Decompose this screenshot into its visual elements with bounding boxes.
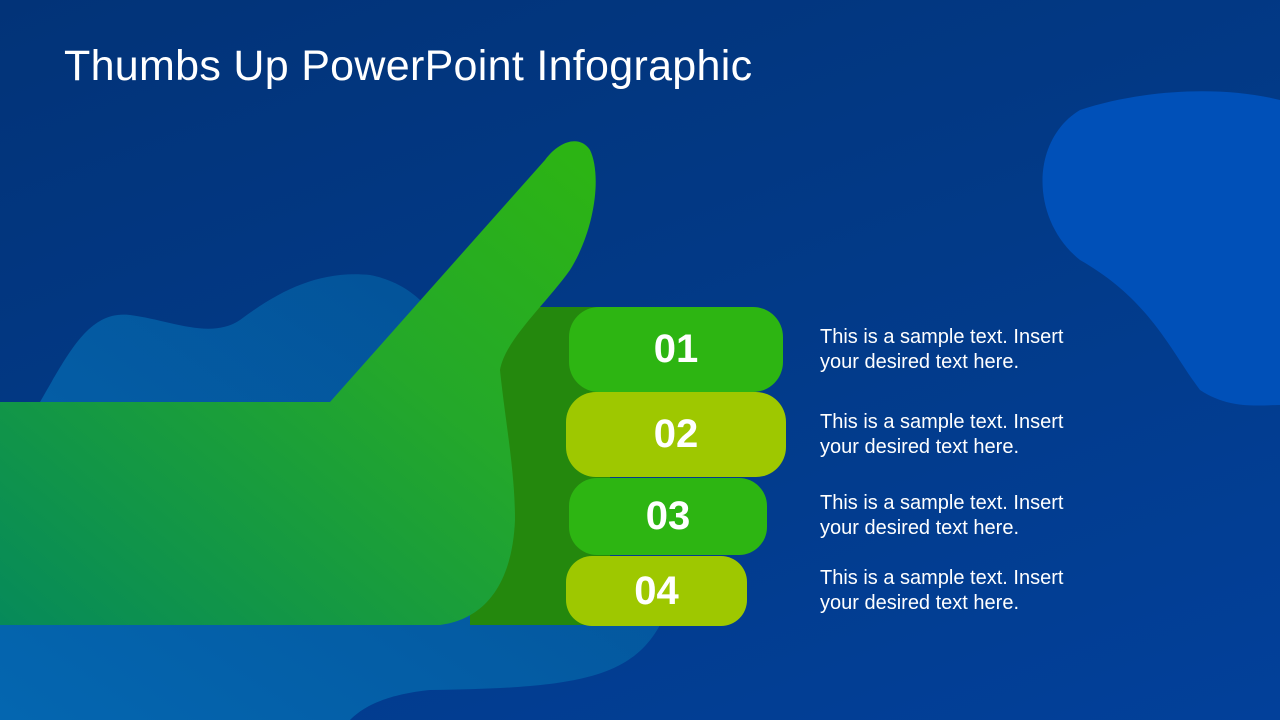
pill 02 — [566, 392, 786, 477]
pill 03 — [569, 478, 767, 555]
pill 04 — [566, 556, 747, 626]
text 04: This is a sample text. Insert your desired text here. — [820, 567, 1063, 614]
pill 01 — [569, 307, 783, 392]
hand: thumb and palm — [0, 141, 596, 625]
pill 03: 03 — [646, 494, 690, 538]
text 01: This is a sample text. Insert your desired text here. — [820, 326, 1063, 373]
text 03: This is a sample text. Insert your desired text here. — [820, 492, 1063, 539]
blob: behind hand — [0, 274, 660, 720]
pill 02: 02 — [654, 412, 698, 456]
text 02: This is a sample text. Insert your desired text here. — [820, 411, 1063, 458]
title: Thumbs Up PowerPoint Infographic — [64, 42, 752, 90]
pill 01: 01 — [654, 327, 698, 371]
pill 04: 04 — [634, 568, 679, 612]
blob: right — [1042, 91, 1280, 406]
hand: dark back — [470, 307, 610, 625]
